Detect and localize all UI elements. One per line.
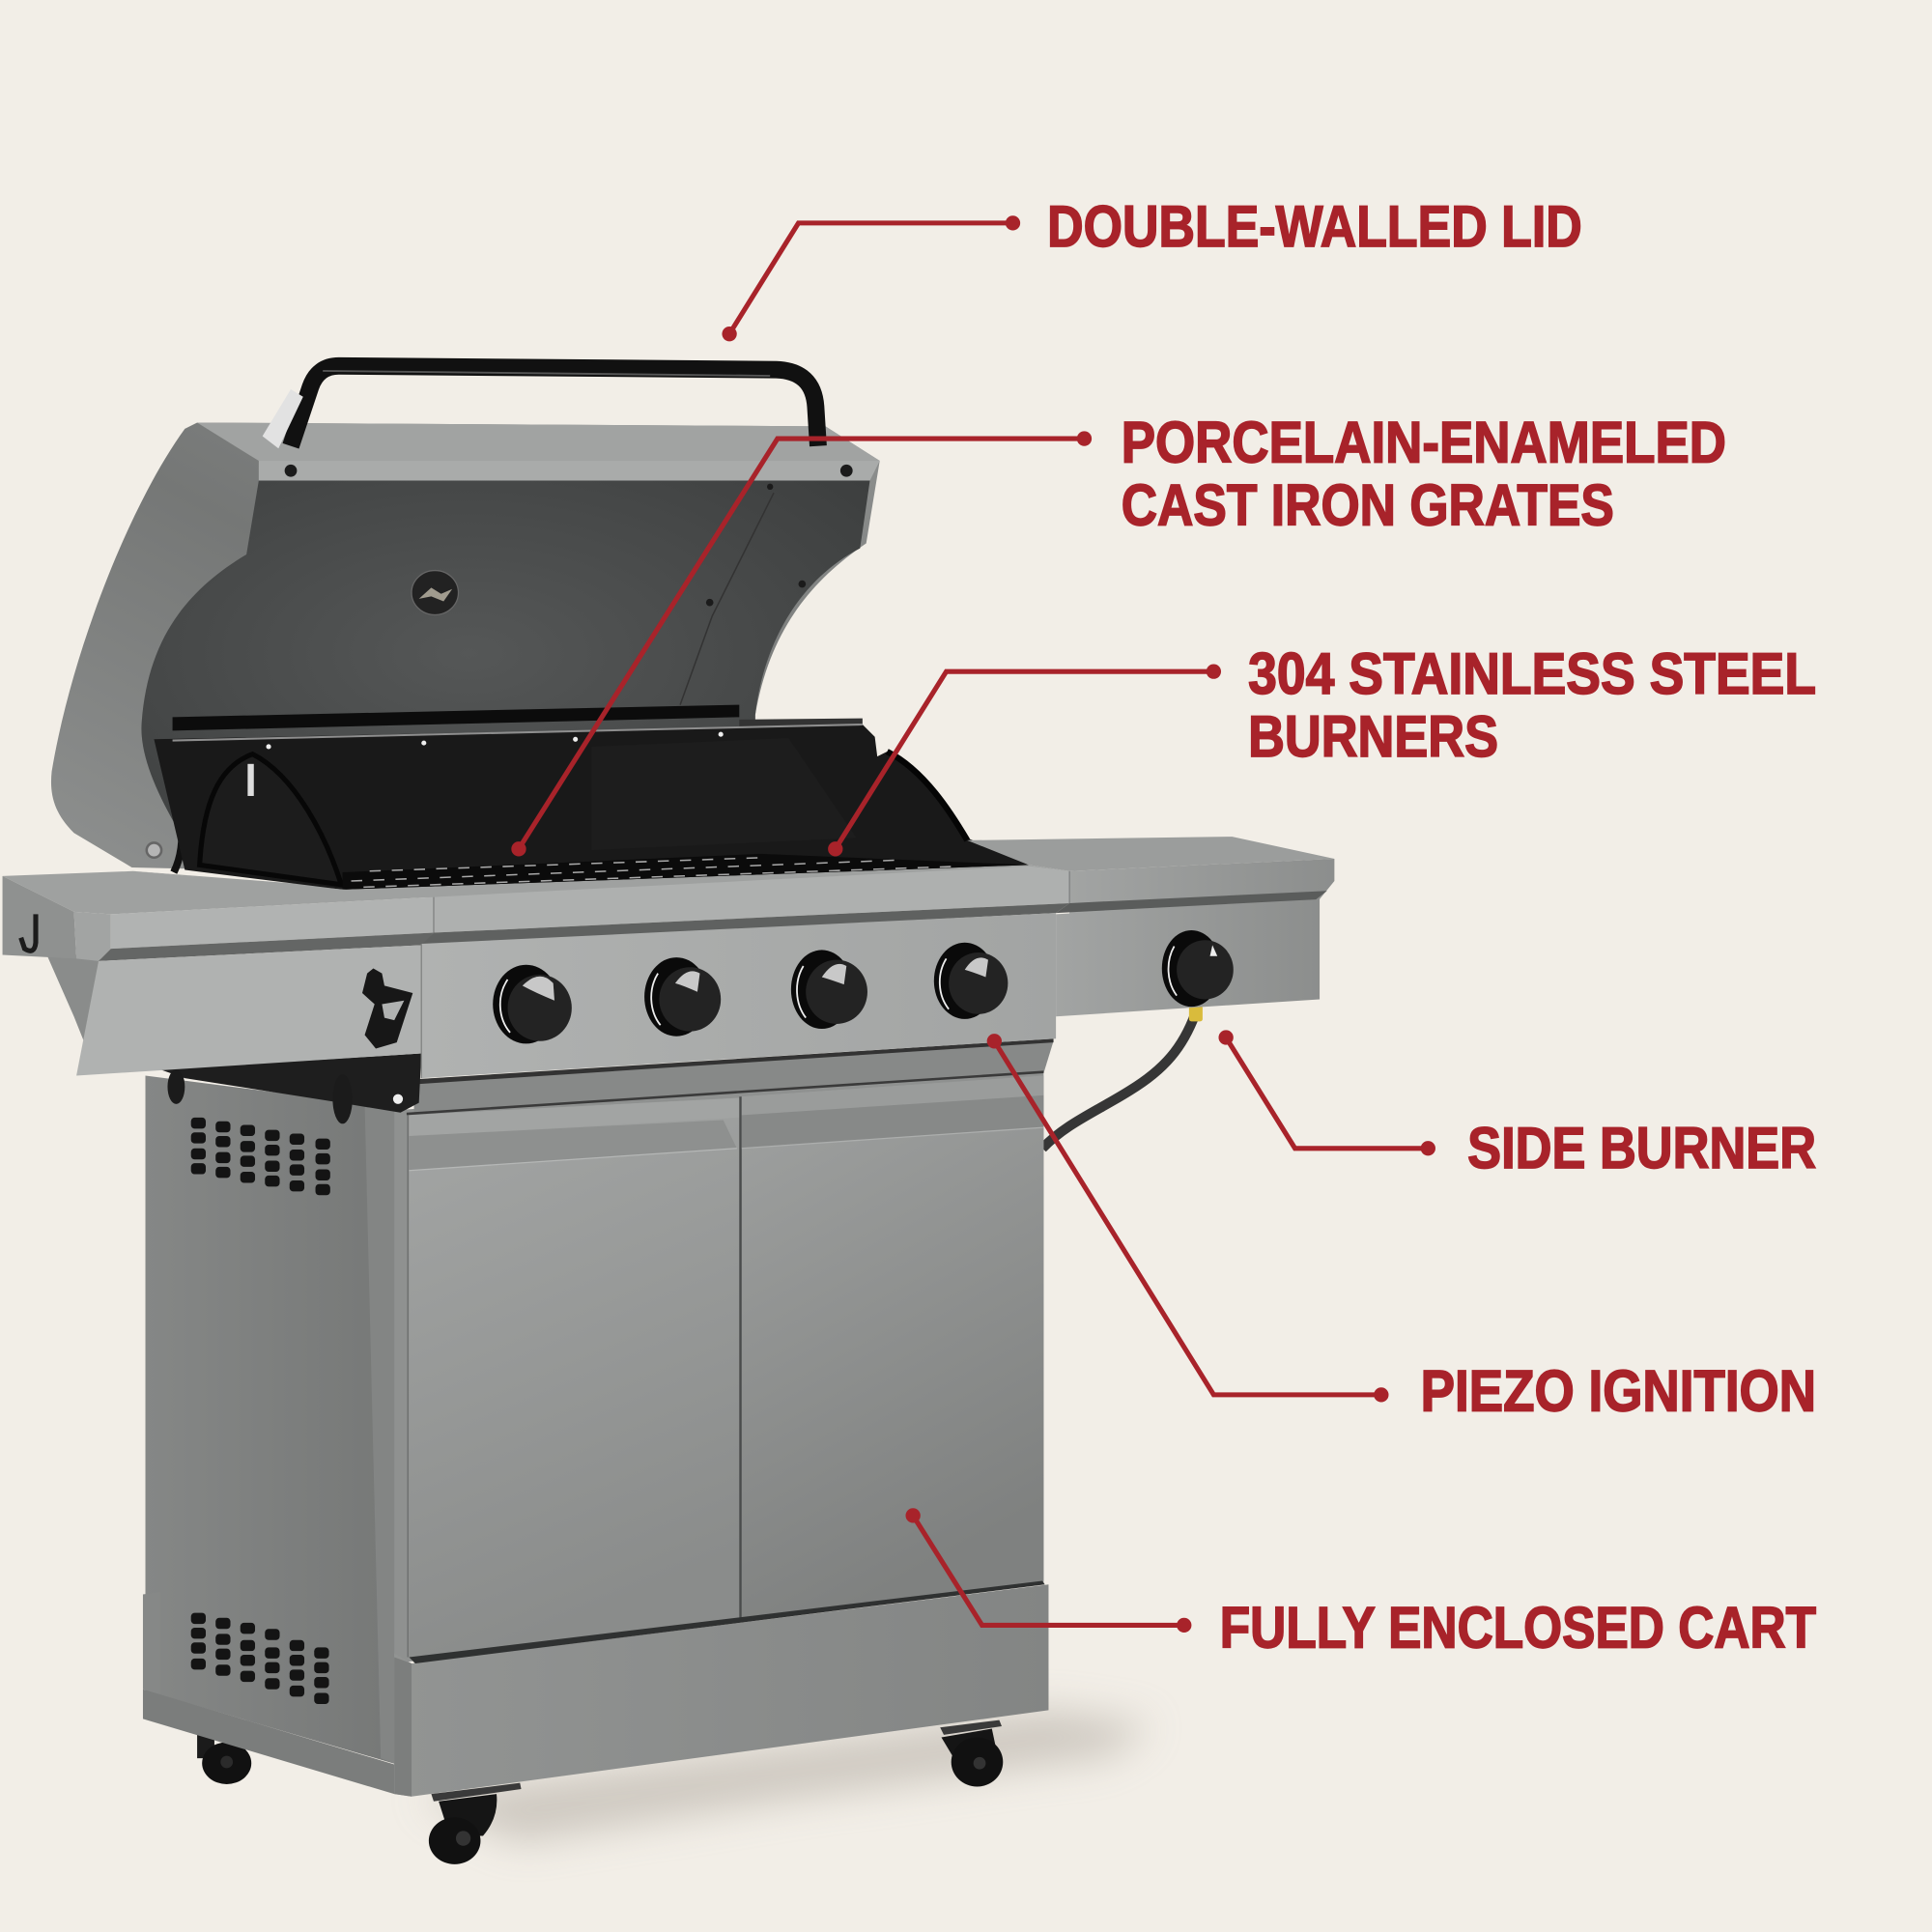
left end cap bbox=[200, 754, 341, 885]
lid hinge bbox=[147, 788, 182, 872]
caster: front bbox=[429, 1783, 522, 1864]
callout: 304 stainless steel burners: BURNERS bbox=[1248, 704, 1498, 769]
handle bbox=[263, 366, 818, 448]
side shelf bracket bbox=[160, 1054, 421, 1123]
left door bbox=[409, 1097, 739, 1658]
warming rack bbox=[739, 719, 863, 727]
callout: side burner: SIDE BURNER bbox=[1467, 1116, 1816, 1180]
callout: porcelain-enameled cast iron grates: PORCELAIN-ENAMELED bbox=[1122, 410, 1726, 474]
knob 5 bbox=[1162, 930, 1234, 1007]
storage hook bbox=[21, 914, 36, 951]
callout: double-walled lid bbox=[722, 194, 1582, 341]
cart side panel bbox=[143, 1076, 397, 1794]
lid bolts bbox=[285, 465, 853, 607]
lid right panel seam bbox=[680, 493, 774, 705]
callout: double-walled lid: DOUBLE-WALLED LID bbox=[1047, 194, 1582, 259]
cart doors bbox=[394, 1069, 1043, 1663]
lid front band bbox=[259, 461, 880, 480]
lid interior bbox=[141, 480, 870, 865]
right end cap edge bbox=[887, 752, 967, 840]
callout: fully enclosed cart bbox=[906, 1508, 1816, 1660]
firebox latch bbox=[247, 764, 254, 796]
side burner shelf bbox=[967, 837, 1334, 1016]
cart base bbox=[394, 1580, 1048, 1797]
callout: piezo ignition: PIEZO IGNITION bbox=[1421, 1358, 1816, 1423]
lower control rail bbox=[407, 1038, 1054, 1114]
thermometer bbox=[412, 571, 458, 614]
lid bbox=[51, 423, 880, 872]
cooking grates bbox=[343, 854, 1029, 890]
knob 1 bbox=[493, 965, 572, 1043]
knob 4 bbox=[934, 943, 1008, 1019]
firebox back wall bbox=[154, 724, 1029, 890]
main control panel bbox=[421, 867, 1069, 1078]
callout: side burner bbox=[1218, 1030, 1816, 1180]
caster: rear right bbox=[940, 1720, 1003, 1786]
callout: 304 stainless steel burners bbox=[828, 641, 1816, 856]
knob 3 bbox=[791, 950, 867, 1029]
rear wall highlight bbox=[591, 738, 856, 850]
callout: 304 stainless steel burners: 304 STAINLESS STEEL bbox=[1248, 641, 1816, 706]
left side shelf bbox=[3, 871, 434, 1076]
caster: rear left bbox=[197, 1731, 251, 1784]
counter strip behind firebox bbox=[133, 865, 1069, 898]
lid outer shell bbox=[51, 423, 880, 868]
knob 2 bbox=[644, 957, 721, 1037]
callout: porcelain-enameled cast iron grates bbox=[511, 410, 1726, 856]
bottle opener bbox=[362, 969, 412, 1048]
lid top face bbox=[197, 423, 880, 461]
callout: fully enclosed cart: FULLY ENCLOSED CART bbox=[1220, 1595, 1816, 1660]
warming rack bar bbox=[173, 705, 739, 730]
firebox bbox=[154, 705, 1029, 890]
callout: porcelain-enameled cast iron grates: CAST IRON GRATES bbox=[1122, 472, 1614, 537]
hose bbox=[1042, 1006, 1203, 1149]
lower vent slots bbox=[191, 1613, 329, 1704]
grill illustration bbox=[3, 366, 1334, 1864]
door gap bbox=[740, 1096, 742, 1618]
upper vent slots bbox=[191, 1118, 330, 1195]
right door bbox=[742, 1076, 1043, 1618]
shelf support bbox=[46, 955, 101, 1041]
panel seams bbox=[421, 871, 1069, 1078]
floor shadow bbox=[419, 1710, 1152, 1842]
callout: piezo ignition bbox=[987, 1034, 1816, 1423]
